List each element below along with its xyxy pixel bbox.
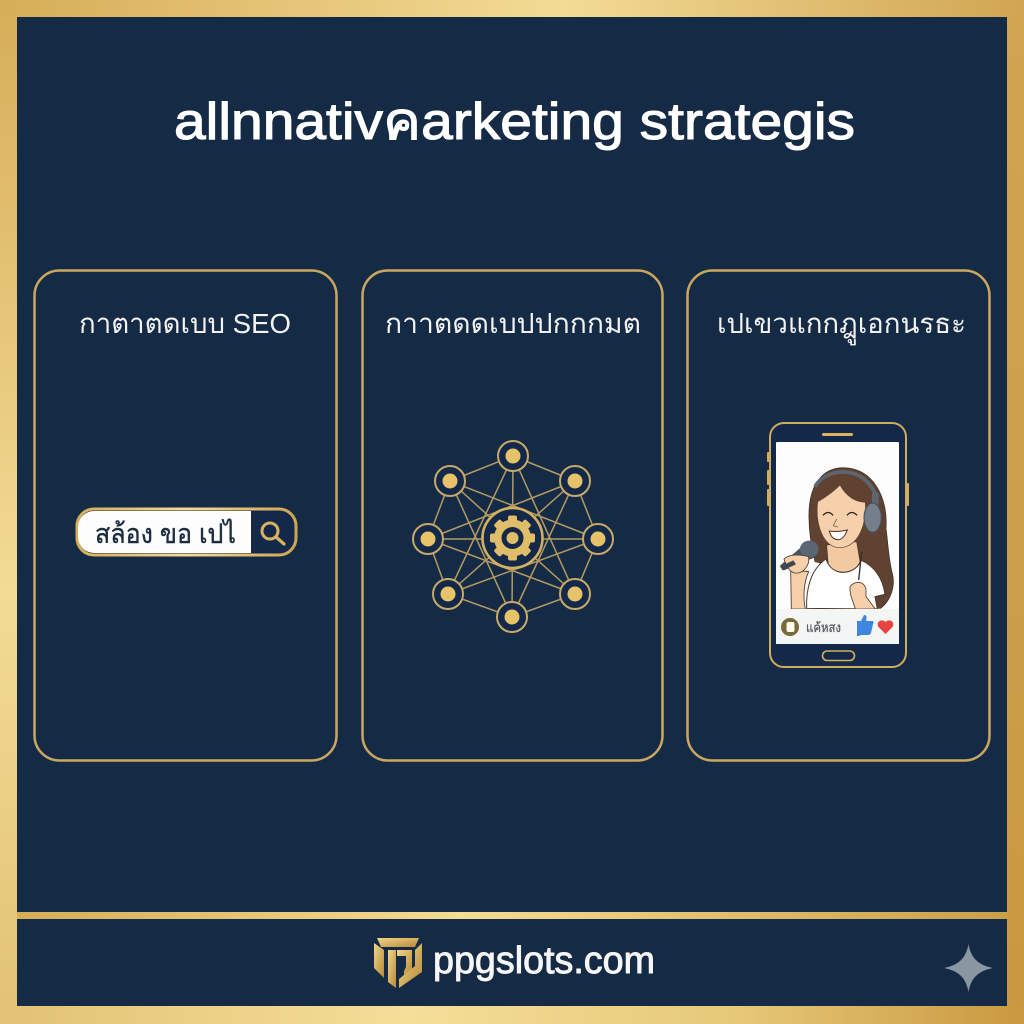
network nodes [413, 441, 613, 632]
panel heading: influencer: เปเขวแกกฎูเอกนรธะ [717, 308, 966, 346]
panel: SEO search [34, 270, 336, 760]
panel heading: network: กาาตดดเบปปกกกมต [385, 308, 641, 339]
phone illustration [767, 423, 909, 667]
panel heading: SEO: กาตาตดเบบ SEO [79, 308, 291, 339]
icon: magnifier [262, 523, 284, 544]
panel: network [362, 270, 662, 760]
phone screen [776, 442, 899, 644]
footer brand text: ppgslots.com [433, 940, 655, 982]
username: แค้หสง [806, 620, 841, 635]
panel: influencer [688, 270, 990, 760]
icon: sparkle [944, 944, 993, 992]
illustration: woman singing with headphones [780, 468, 893, 609]
network diagram [413, 441, 613, 632]
phone home button [822, 651, 854, 660]
search bar text: สล้อง ขอ เปไ [95, 519, 236, 549]
avatar [781, 618, 799, 636]
phone side buttons [767, 452, 909, 506]
social strip [776, 609, 899, 644]
icon: heart [878, 620, 893, 634]
icon: thumbs up [857, 615, 874, 636]
phone body [770, 423, 906, 667]
icon: central gear [482, 508, 542, 568]
phone speaker [822, 433, 853, 436]
footer logo [374, 938, 422, 988]
search bar [77, 509, 296, 555]
title: allnnativคarketing strategis [174, 93, 855, 151]
